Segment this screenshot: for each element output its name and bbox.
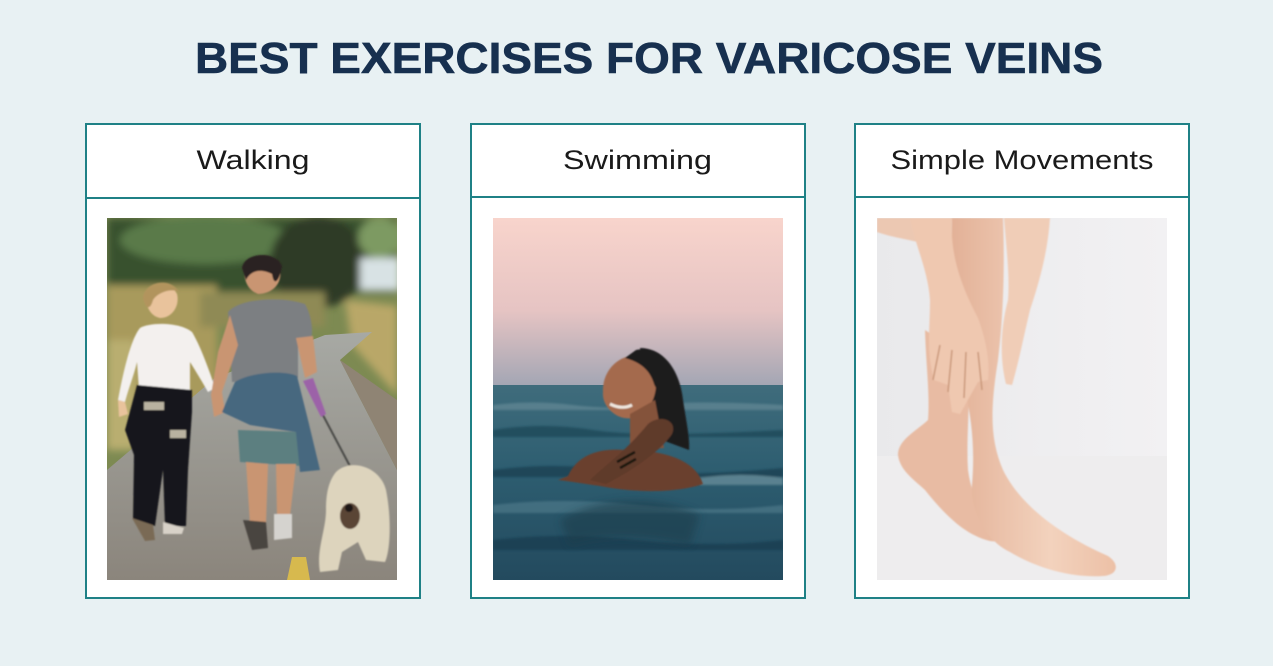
leash: [322, 414, 351, 466]
photo: woman in the sea at dusk: [493, 218, 783, 580]
front leg: [952, 218, 1116, 576]
heading: simple movements: Simple Movements: [890, 145, 1154, 175]
man: [211, 255, 320, 550]
title: BEST EXERCISES FOR VARICOSE VEINS: [195, 34, 1103, 83]
panel frame: swimming: [471, 124, 805, 598]
heading: walking: Walking: [196, 145, 310, 175]
woman: [118, 283, 215, 541]
road: [107, 332, 397, 580]
panel frame: walking: [86, 124, 420, 598]
back leg: [898, 330, 1006, 541]
upper body and arms: [877, 218, 918, 242]
photo: couple walking a dog: [107, 216, 402, 580]
swimmer: [558, 348, 703, 491]
dog: [319, 465, 390, 572]
panel frame: simple movements: [855, 124, 1189, 598]
heading: swimming: Swimming: [563, 145, 712, 175]
photo: legs and hands: [877, 218, 1167, 580]
panel: simple movements: [855, 124, 1190, 598]
panel: swimming: [471, 124, 806, 598]
panel: walking: [86, 124, 420, 598]
